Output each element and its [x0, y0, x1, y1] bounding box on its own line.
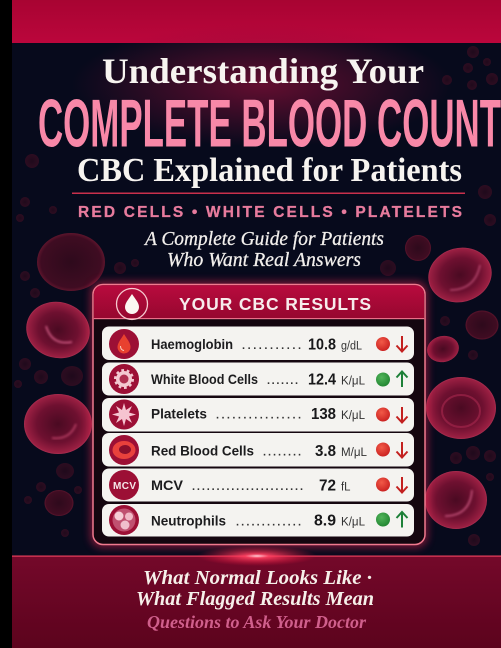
panel: CBC results [90, 281, 428, 548]
row: Red Blood Cells: 3.8 [315, 443, 336, 460]
row: Neutrophils: 8.9 [314, 512, 336, 530]
row: Neutrophils: Neutrophils [151, 512, 226, 528]
row: MCV: MCV [151, 477, 184, 493]
panel heading: YOUR CBC RESULTS [179, 294, 371, 314]
icon: MCV badge: MCV [113, 481, 136, 492]
blood cell: small bubble upper right [405, 235, 431, 261]
blood cell: right top [422, 241, 498, 309]
row: MCV: fL [341, 482, 351, 494]
blood cell: left small [44, 490, 74, 516]
subtitle: CBC Explained for Patients [77, 152, 462, 189]
row: Neutrophils [102, 504, 414, 536]
row: Red Blood Cells [102, 433, 414, 466]
footer line 2: What Flagged Results Mean [136, 588, 374, 610]
icon: red blood cell [109, 435, 139, 465]
row: Platelets: Platelets [151, 406, 207, 422]
blood cell: right large [426, 377, 496, 439]
icon: MCV badge [109, 470, 139, 500]
category line: RED CELLS • WHITE CELLS • PLATELETS [78, 204, 462, 221]
row: White Blood Cells: 12.4 [308, 372, 336, 388]
blood cell: left upper [20, 295, 96, 365]
row: White Blood Cells: K/μL [341, 376, 366, 388]
icon: blood drop [116, 288, 148, 320]
title divider [72, 192, 465, 194]
icon: white blood cell [109, 364, 139, 394]
row: White Blood Cells: ....... [267, 375, 298, 387]
black left margin [0, 0, 12, 648]
footer line 3: Questions to Ask Your Doctor [147, 612, 367, 632]
tagline line 2: Who Want Real Answers [167, 250, 361, 271]
row: Haemoglobin: g/dL [341, 340, 363, 352]
row: Red Blood Cells: Red Blood Cells [151, 442, 254, 458]
blood cell: right lower [425, 471, 487, 529]
row: MCV: ....................... [192, 481, 303, 493]
bottom red band [12, 556, 501, 648]
blood cell: top left large [37, 233, 105, 291]
row: Haemoglobin [102, 326, 414, 360]
row: Neutrophils: K/μL [341, 516, 366, 528]
row: Neutrophils: ............. [236, 516, 301, 528]
row: White Blood Cells: White Blood Cells [151, 371, 258, 387]
icon: platelet [109, 400, 139, 430]
icon: haemoglobin drop [109, 329, 139, 359]
blood cell: left lower [24, 394, 92, 454]
background bubbles [14, 46, 498, 546]
row: Platelets [102, 398, 414, 432]
blood cell: right small [425, 333, 461, 365]
row: Haemoglobin: Haemoglobin [151, 336, 233, 352]
title line 1: Understanding Your [102, 51, 424, 91]
dark navy background [12, 43, 501, 556]
row: MCV [102, 468, 414, 502]
row: MCV: 72 [319, 478, 336, 494]
top red band [12, 0, 501, 43]
tagline line 1: A Complete Guide for Patients [143, 229, 384, 250]
row: Haemoglobin: ........... [242, 340, 301, 352]
footer line 1: What Normal Looks Like · [143, 567, 372, 589]
band glowing edge [12, 546, 501, 566]
row: Red Blood Cells: ........ [263, 446, 301, 458]
glow behind title [72, 23, 452, 147]
icon: neutrophil [109, 505, 139, 535]
row: White Blood Cells [102, 362, 414, 396]
row: Haemoglobin: 10.8 [308, 336, 336, 354]
row: Platelets: K/μL [341, 410, 366, 422]
blood cell: right dim [466, 310, 498, 340]
row: Platelets: ................ [216, 410, 301, 422]
row: Red Blood Cells: M/μL [341, 447, 368, 459]
panel header [94, 285, 424, 319]
row: Platelets: 138 [311, 406, 336, 423]
